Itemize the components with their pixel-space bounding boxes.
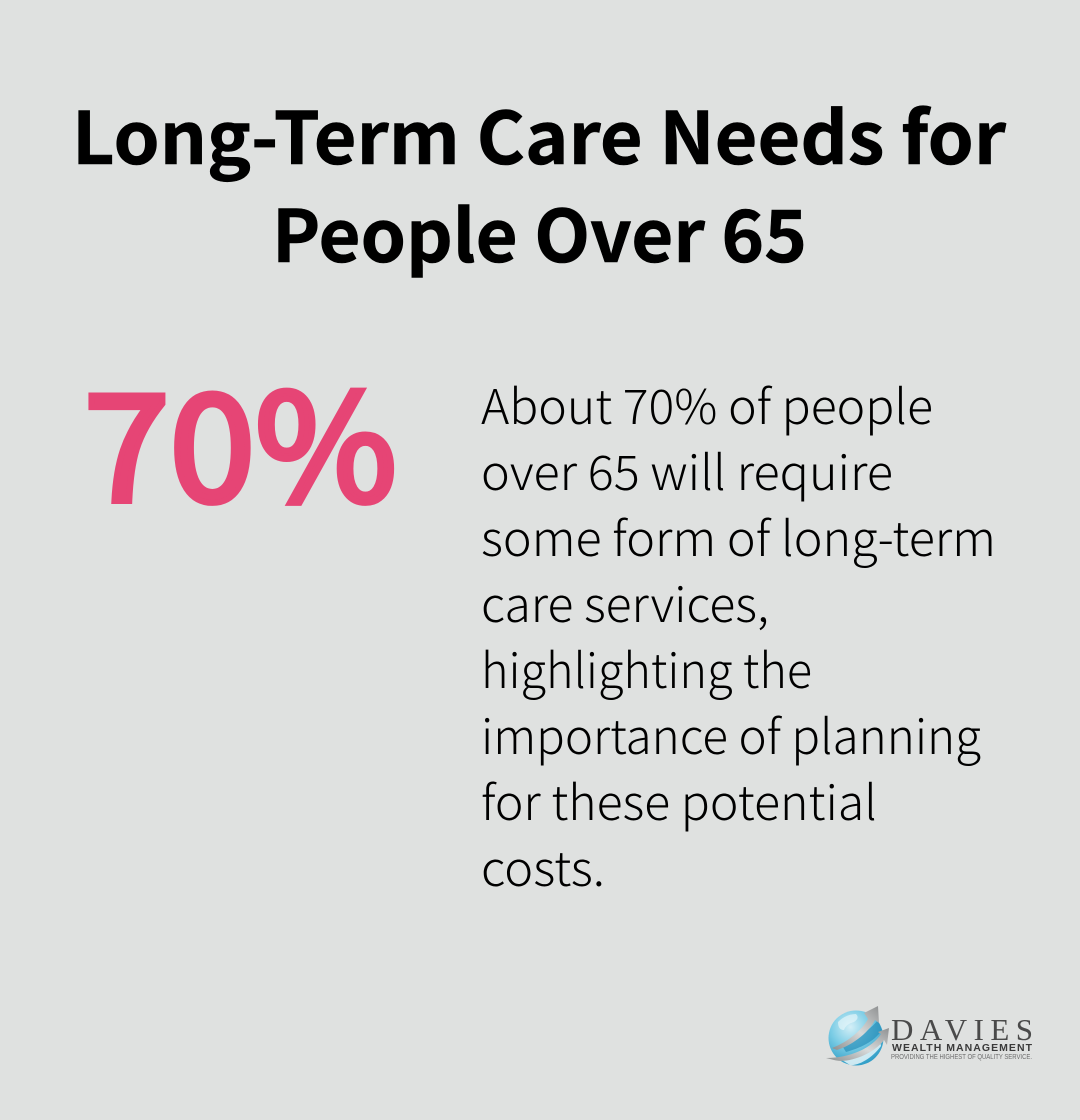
- description text block: [481, 368, 996, 900]
- logo: Davies Wealth Management: [826, 1006, 1033, 1066]
- description text block: About 70% of people: [481, 368, 933, 438]
- description text block: costs.: [481, 830, 605, 900]
- title: [72, 80, 1007, 283]
- description text block: highlighting the: [481, 632, 812, 702]
- logo tagline: PROVIDING THE HIGHEST OF QUALITY SERVICE.: [891, 1054, 1032, 1061]
- description text block: importance of planning: [481, 698, 981, 768]
- title: Long-Term Care Needs for: [72, 80, 1007, 185]
- description text block: over 65 will require: [481, 434, 893, 504]
- description text block: for these potential: [481, 764, 877, 834]
- description text block: some form of long-term: [481, 500, 996, 570]
- icon: globe with arrows: [826, 1006, 889, 1066]
- logo wordmark: DAVIES: [891, 1012, 1033, 1047]
- title: People Over 65: [272, 178, 807, 283]
- description text block: care services,: [481, 566, 769, 636]
- logo subtitle: WEALTH MANAGEMENT: [892, 1042, 1033, 1054]
- big statistic: 70%: 70%: [84, 329, 397, 544]
